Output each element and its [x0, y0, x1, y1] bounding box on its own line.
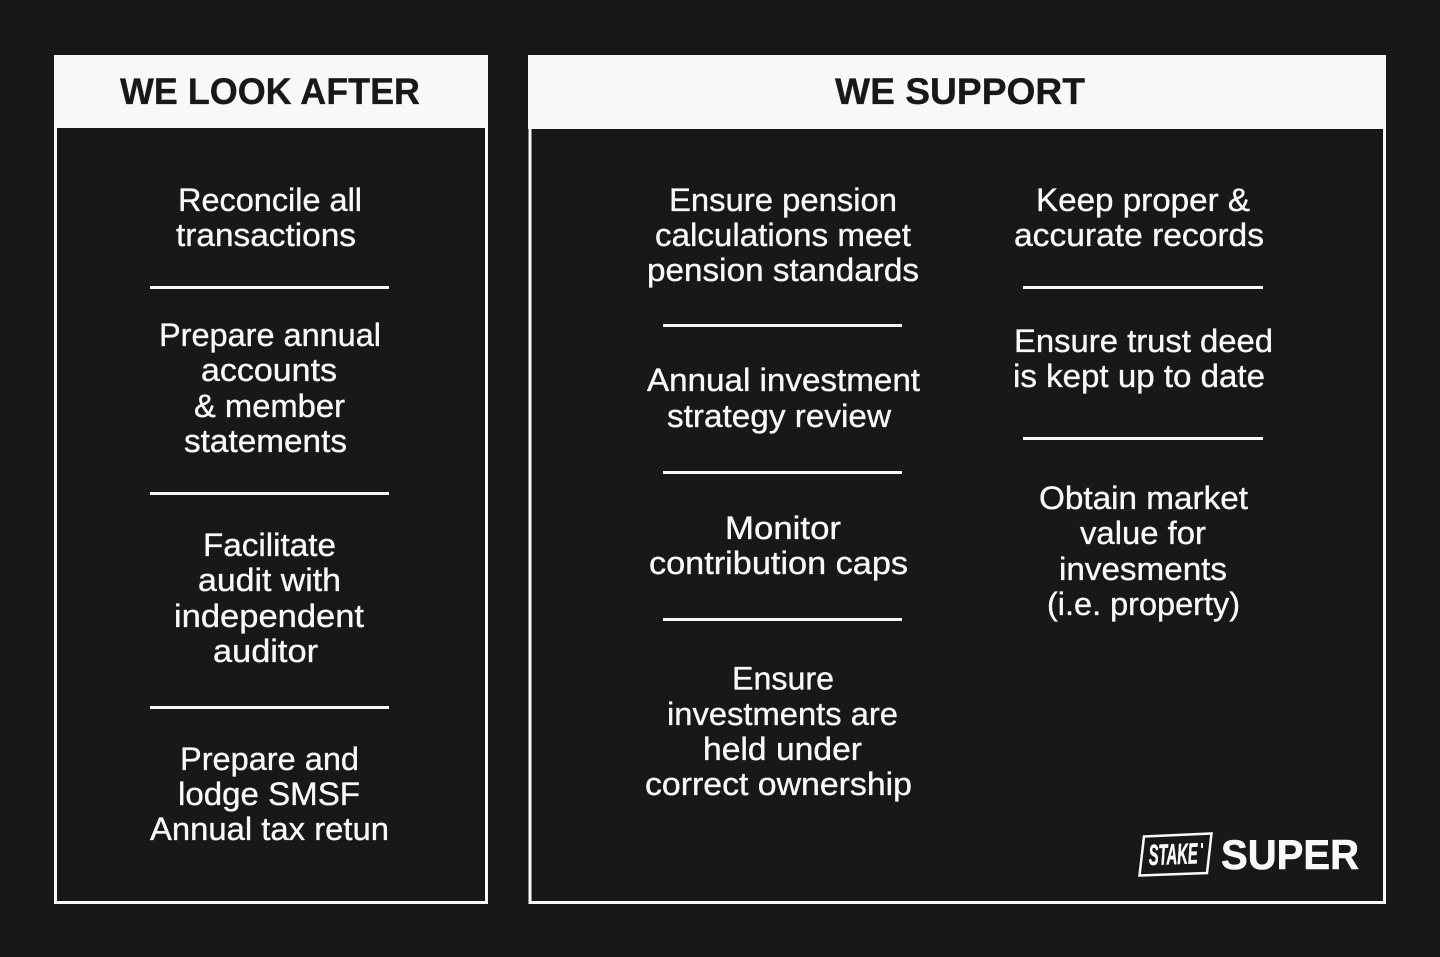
text: contribution caps: contribution caps [649, 545, 908, 581]
text: market value: Obtain market [1039, 480, 1248, 516]
text: contribution caps [649, 510, 908, 581]
text: market value: value for [1080, 515, 1206, 551]
heading: we support [528, 55, 1386, 129]
text: proper records: Keep proper & [1036, 182, 1250, 218]
panel: we look after [54, 55, 488, 902]
text: market value [1039, 480, 1248, 622]
text: market value: (i.e. property) [1047, 586, 1240, 622]
text: prepare and lodge tax return: Prepare and [180, 741, 359, 777]
text: reconcile all transactions: transactions [176, 217, 356, 253]
text: investment strategy: Annual investment [647, 362, 920, 398]
text: prepare and lodge tax return: lodge SMSF [178, 776, 360, 812]
text: correct ownership: investments are [667, 696, 898, 732]
text: pension calculations: pension standards [647, 252, 919, 288]
text: trust deed: Ensure trust deed [1014, 323, 1273, 359]
text: pension calculations [647, 182, 919, 288]
logo: stake super [1140, 831, 1359, 878]
text: facilitate audit [174, 527, 364, 669]
text: trust deed: is kept up to date [1013, 358, 1265, 394]
heading: we support: WE SUPPORT [835, 71, 1085, 112]
text: market value: invesments [1059, 551, 1227, 587]
text: proper records: accurate records [1014, 217, 1264, 253]
text: correct ownership: held under [703, 731, 862, 767]
text: prepare annual accounts: accounts [201, 352, 337, 388]
text: trust deed [1013, 323, 1273, 394]
text: facilitate audit: audit with [198, 562, 341, 598]
text: reconcile all transactions [176, 182, 362, 253]
text: facilitate audit: independent [174, 598, 364, 634]
text: investment strategy: strategy review [667, 398, 892, 434]
text: correct ownership: Ensure [732, 660, 834, 696]
logo: stake super: STAKE [1148, 838, 1199, 872]
text: prepare and lodge tax return [150, 741, 389, 847]
text: pension calculations: calculations meet [655, 217, 911, 253]
text: prepare annual accounts [159, 317, 381, 459]
heading: we look after: WE LOOK AFTER [120, 71, 420, 112]
text: facilitate audit: auditor [213, 633, 318, 669]
text: correct ownership: correct ownership [645, 766, 912, 802]
text: investment strategy [647, 362, 920, 434]
text: facilitate audit: Facilitate [203, 527, 336, 563]
heading: we look after [54, 55, 488, 128]
text: prepare annual accounts: Prepare annual [159, 317, 381, 353]
text: correct ownership [645, 660, 912, 802]
text: proper records [1014, 182, 1264, 253]
text: contribution caps: Monitor [725, 510, 841, 546]
text: prepare and lodge tax return: Annual tax retun [150, 811, 389, 847]
text: prepare annual accounts: & member [194, 388, 345, 424]
text: prepare annual accounts: statements [184, 423, 347, 459]
text: pension calculations: Ensure pension [669, 182, 897, 218]
text: reconcile all transactions: Reconcile all [178, 182, 362, 218]
logo: stake super: SUPER [1221, 831, 1359, 878]
panel: we support [528, 55, 1386, 902]
